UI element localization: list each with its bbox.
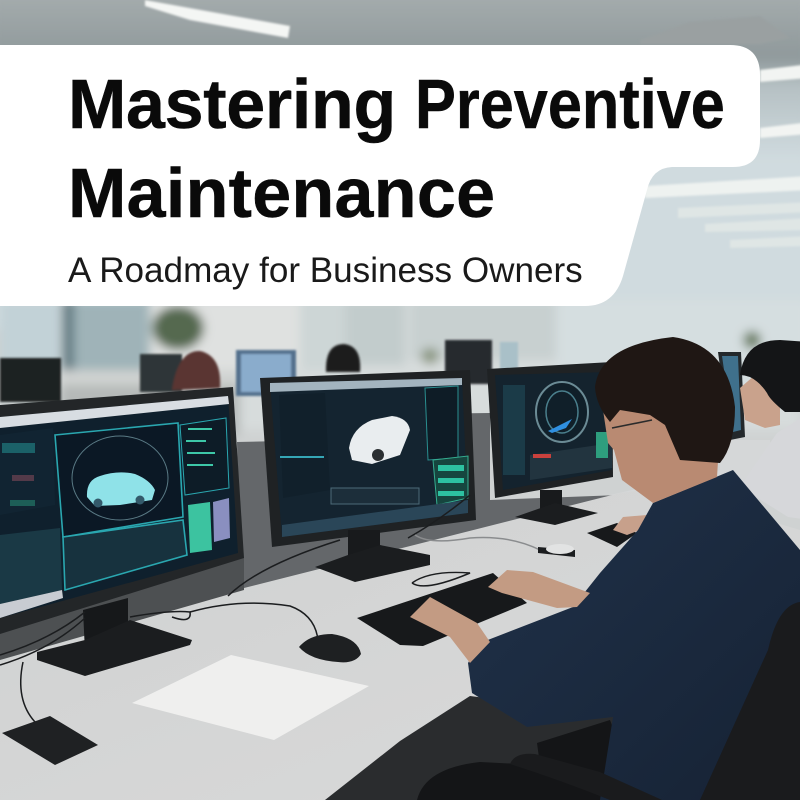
title: Maintenance (68, 154, 495, 232)
background monitors and colleagues (0, 340, 518, 402)
under-desk shadow (325, 696, 620, 800)
office chair (510, 602, 800, 800)
small mouse (538, 544, 575, 557)
paper document (132, 655, 369, 740)
main worker (410, 337, 800, 800)
title: Preventive (415, 65, 725, 143)
ceiling lights (145, 0, 800, 248)
dark lower monitor edge (0, 557, 244, 660)
monitor 1 with car diagnostics (0, 387, 244, 676)
title panel (0, 45, 760, 306)
desk partition (237, 413, 620, 600)
title: Mastering (68, 65, 396, 143)
small keyboard (587, 523, 637, 547)
mouse (299, 634, 361, 662)
far desk strip (610, 440, 770, 495)
desk device (2, 716, 98, 765)
main keyboard (357, 573, 527, 646)
second worker (735, 340, 800, 520)
small hand on far keyboard (613, 515, 647, 535)
title (68, 65, 725, 232)
monitor 2 with car model (260, 370, 476, 582)
desk surface (0, 488, 800, 800)
subtitle: A Roadmay for Business Owners (68, 251, 583, 290)
far-right monitor (718, 352, 745, 440)
monitor 3 with gauge display (487, 362, 613, 525)
background office wall (0, 0, 800, 435)
cables (0, 495, 540, 722)
pants (417, 720, 640, 800)
